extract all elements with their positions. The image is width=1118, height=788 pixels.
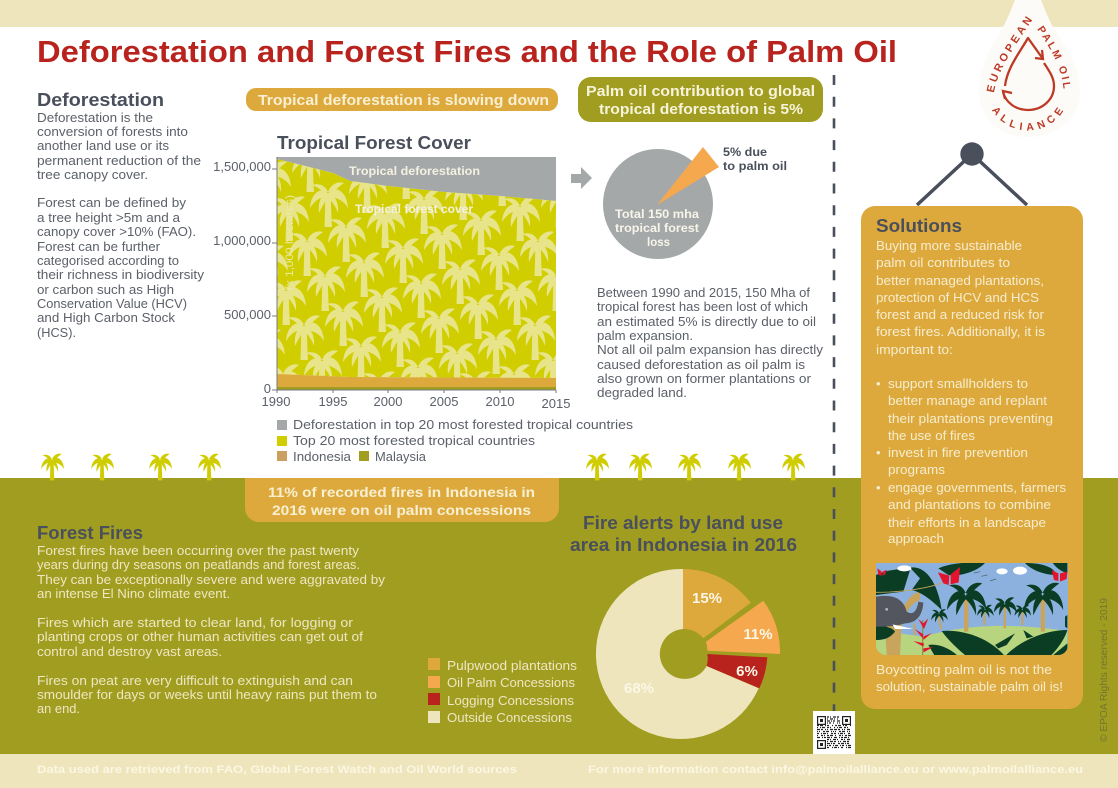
donut legend: Oil Palm Concessions (447, 675, 576, 690)
y axis labels: 1,500,000 (213, 159, 271, 174)
text block: deforestation definition: Deforestation is the (37, 110, 153, 125)
pie chart: palm oil share of loss: Total 150 mha (615, 207, 699, 221)
area chart: tropical forest cover: 500,000 (224, 307, 271, 322)
area chart: tropical forest cover: 0 (264, 381, 271, 396)
solutions bullets: their efforts in a landscape (888, 515, 1046, 530)
palm tree pattern (278, 161, 556, 378)
chart legend: Deforestation in top 20 most forested tropical countries (293, 417, 634, 432)
footer band (0, 754, 1118, 788)
area chart: tropical forest cover (214, 157, 570, 408)
solutions intro text: better managed plantations, (876, 273, 1044, 288)
text block: deforestation definition: their richness in biodiversity (37, 267, 205, 282)
chart legend: Malaysia (375, 449, 427, 464)
text block: forest fires: planting crops or other human activities can get out of (37, 629, 363, 644)
pie chart: palm oil share of loss: to palm oil (723, 159, 787, 173)
pill: palm oil contribution (578, 77, 823, 122)
top band (0, 0, 1118, 27)
olive lower panel (0, 478, 1118, 754)
text block: deforestation definition: tree canopy cover. (37, 167, 148, 182)
panel: solutions (861, 206, 1083, 709)
donut legend: Pulpwood plantations (447, 658, 578, 673)
text block: forest loss explanation: also grown on former plantations or (597, 371, 812, 386)
solutions intro text: Buying more sustainable (876, 238, 1022, 253)
donut legend: Logging Concessions (447, 693, 575, 708)
logo: European Palm Oil Alliance: ALLIANCE (992, 107, 1064, 131)
closing statement (876, 662, 1063, 694)
pill: palm oil contribution: tropical deforestation is 5% (599, 102, 803, 118)
text block: deforestation definition: Forest can be defined by (37, 195, 187, 210)
text block: deforestation definition: Conservation Value (HCV) (37, 296, 187, 311)
logo: European Palm Oil Alliance: PALM OIL (1037, 26, 1070, 88)
deforestation area (277, 157, 556, 201)
text block: deforestation definition: (HCS). (37, 325, 76, 340)
palm icon row: right (586, 454, 805, 480)
area chart: tropical forest cover: 2015 (542, 396, 570, 411)
area chart: tropical forest cover: 1995 (319, 394, 347, 409)
solutions intro text: forest fires. Additionally, it is (876, 324, 1046, 339)
heading: Deforestation: Deforestation (37, 89, 164, 110)
dashed divider (833, 75, 835, 711)
QR code (813, 711, 855, 754)
solutions bullets: support smallholders to (888, 376, 1028, 391)
donut chart: fire alerts (596, 569, 780, 739)
text block: forest fires: an end. (37, 701, 80, 716)
text block: forest loss explanation (597, 285, 824, 400)
logo: European Palm Oil Alliance (986, 0, 1070, 131)
in-chart labels: Tropical deforestation (349, 166, 480, 178)
axes (272, 157, 556, 393)
chart legend (277, 417, 634, 464)
solutions intro text: forest and a reduced risk for (876, 307, 1045, 322)
pill: recorded fires (245, 478, 559, 522)
area chart: tropical forest cover: 2000 (374, 394, 402, 409)
icon: hanger (917, 142, 1027, 205)
solutions bullets: and plantations to combine (888, 497, 1051, 512)
pill: tropical deforestation slowing: Tropical deforestation is slowing down (258, 93, 549, 109)
copyright note: © EPOA Rights reserved - 2019 (1098, 598, 1110, 742)
footer: data sources: Data used are retrieved from FAO, Global Forest Watch and Oil World sources (37, 764, 517, 776)
pie chart: palm oil share of loss (603, 145, 787, 259)
text block: forest fires: control and destroy vast areas. (37, 644, 222, 659)
donut chart: fire alerts: 6% (736, 663, 758, 680)
text block: forest loss explanation: tropical forest has been lost of which (597, 299, 808, 314)
solutions bullets: invest in fire prevention (888, 445, 1028, 460)
text block: deforestation definition: categorised according to (37, 253, 179, 268)
text block: forest fires: Forest fires have been occurring over the past twenty (37, 543, 360, 558)
forest area (277, 159, 556, 378)
solutions intro text: palm oil contributes to (876, 255, 1010, 270)
text block: forest loss explanation: caused deforestation as oil palm is (597, 357, 806, 372)
text block: deforestation definition (37, 110, 205, 340)
pie chart: palm oil share of loss: loss (647, 235, 670, 249)
pill: palm oil contribution: Palm oil contribution to global (586, 84, 815, 100)
solutions bullets: better manage and replant (888, 393, 1047, 408)
text block: deforestation definition: Forest can be further (37, 239, 161, 254)
text block: forest fires: Fires on peat are very difficult to extinguish and can (37, 673, 353, 688)
Indonesia area (277, 374, 556, 387)
text block: forest fires (37, 543, 386, 716)
pill: recorded fires: 2016 were on oil palm concessions (272, 502, 531, 518)
closing statement: solution, sustainable palm oil is! (876, 679, 1063, 694)
text block: forest fires: smoulder for days or weeks until heavy rains put them to (37, 687, 377, 702)
palm icon row: left (41, 454, 221, 480)
logo: European Palm Oil Alliance: EUROPEAN (986, 16, 1032, 92)
text block: forest loss explanation: Not all oil palm expansion has directly (597, 342, 824, 357)
text block: forest fires: Fires which are started to clear land, for logging or (37, 615, 354, 630)
heading: Forest Fires: Forest Fires (37, 522, 143, 543)
donut chart: fire alerts: 11% (743, 626, 773, 643)
text block: forest fires: an intense El Nino climate event. (37, 586, 230, 601)
pill: recorded fires: 11% of recorded fires in Indonesia in (268, 484, 535, 500)
solutions intro text (876, 238, 1046, 357)
text block: deforestation definition: permanent reduction of the (37, 153, 201, 168)
solutions bullets: • (876, 376, 881, 391)
text block: forest fires: years during dry seasons on peatlands and forest areas. (37, 557, 360, 572)
area chart: tropical forest cover: 2010 (486, 394, 514, 409)
donut legend (428, 658, 578, 725)
solutions bullets (876, 376, 1066, 546)
chart legend: Indonesia (293, 449, 352, 464)
heading: fire alerts: area in Indonesia in 2016 (570, 534, 797, 555)
text block: forest fires: They can be exceptionally severe and were aggravated by (37, 572, 386, 587)
heading: fire alerts (570, 512, 797, 555)
solutions bullets: approach (888, 531, 944, 546)
donut legend: Outside Concessions (447, 710, 573, 725)
text block: forest loss explanation: palm expansion. (597, 328, 693, 343)
solutions bullets: engage governments, farmers (888, 480, 1066, 495)
chart legend: Top 20 most forested tropical countries (293, 433, 536, 448)
area chart: tropical forest cover: (x 1,000 hectares) (284, 195, 296, 290)
text block: deforestation definition: canopy cover >10% (FAO). (37, 224, 196, 239)
solutions bullets: • (876, 445, 881, 460)
solutions bullets: the use of fires (888, 428, 975, 443)
area chart: tropical forest cover: 1,000,000 (213, 233, 271, 248)
arrow: chart to pie (571, 167, 592, 189)
footer: contact: For more information contact info@palmoilalliance.eu or www.palmoilalliance.eu (588, 764, 1083, 776)
closing statement: Boycotting palm oil is not the (876, 662, 1052, 677)
heading: fire alerts: Fire alerts by land use (583, 512, 783, 533)
text block: forest loss explanation: degraded land. (597, 385, 687, 400)
solutions bullets: • (876, 480, 881, 495)
Malaysia area (277, 387, 556, 390)
area chart: tropical forest cover: Tropical forest cover (355, 204, 474, 216)
pie chart: palm oil share of loss: tropical forest (615, 221, 699, 235)
solutions intro text: protection of HCV and HCS (876, 290, 1039, 305)
illustration: jungle with elephant (876, 563, 1068, 656)
text block: deforestation definition: a tree height >5m and a (37, 210, 181, 225)
text block: forest loss explanation: Between 1990 and 2015, 150 Mha of (597, 285, 810, 300)
text block: deforestation definition: conversion of forests into (37, 124, 188, 139)
heading: Solutions: Solutions (876, 215, 962, 236)
pill: tropical deforestation slowing (246, 88, 558, 111)
chart heading: Tropical Forest Cover: Tropical Forest Cover (277, 132, 471, 153)
title: Deforestation and Forest Fires and the Role of Palm Oil (37, 35, 897, 69)
text block: deforestation definition: or carbon such as High (37, 282, 174, 297)
text block: deforestation definition: another land use or its (37, 138, 170, 153)
solutions bullets: programs (888, 462, 946, 477)
x axis labels: 1990 (262, 394, 290, 409)
area chart: tropical forest cover: 2005 (430, 394, 458, 409)
donut chart: fire alerts: 68% (624, 680, 654, 697)
solutions intro text: important to: (876, 342, 953, 357)
text block: forest loss explanation: an estimated 5% is directly due to oil (597, 314, 816, 329)
solutions bullets: their plantations preventing (888, 411, 1053, 426)
text block: deforestation definition: and High Carbon Stock (37, 310, 176, 325)
pie chart: palm oil share of loss: 5% due (723, 145, 767, 159)
donut chart: fire alerts: 15% (692, 590, 722, 607)
